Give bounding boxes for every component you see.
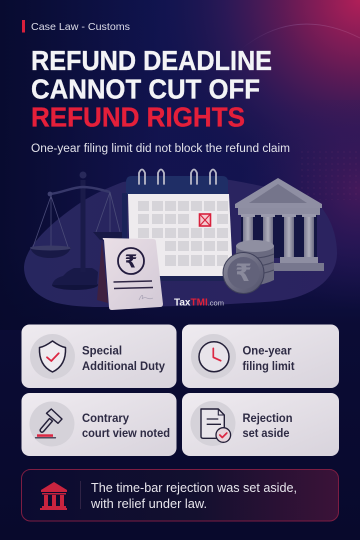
rings [139, 170, 216, 184]
calendar grid [138, 201, 228, 266]
callout text: with relief under law. [90, 496, 207, 511]
illustration [24, 170, 337, 310]
icon: gavel [36, 409, 62, 438]
panel: special additional duty [22, 324, 176, 388]
label: Contrary [82, 411, 129, 425]
logo: TaxTMI.com: TaxTMI.com [174, 298, 224, 308]
marked deadline date [200, 214, 210, 226]
label: filing limit [242, 359, 294, 373]
label: court view noted [82, 426, 170, 440]
icon: refund receipt [97, 238, 163, 310]
icon: court building [40, 482, 67, 510]
icon: rupee coins [223, 240, 274, 294]
panel: one-year filing limit [182, 324, 339, 388]
icon: rupee coins: ₹ [235, 259, 252, 287]
label: Rejection [242, 411, 292, 425]
label [242, 411, 292, 440]
callout text: The time-bar rejection was set aside, [91, 480, 297, 495]
label [82, 344, 165, 373]
panel: contrary court view [22, 393, 176, 456]
icon: refund receipt: ₹ [125, 252, 137, 272]
icon: shield check [39, 341, 66, 372]
title: REFUND RIGHTS [31, 102, 245, 132]
label [242, 344, 294, 373]
title: CANNOT CUT OFF [31, 74, 260, 104]
panel: rejection set aside [182, 393, 339, 456]
title: REFUND DEADLINE [31, 45, 272, 76]
icon: document check [201, 409, 231, 442]
icon: calendar [122, 170, 233, 281]
label [82, 411, 170, 440]
label: Special [82, 344, 122, 358]
label: One-year [242, 344, 292, 358]
title [31, 45, 272, 132]
subtitle: One-year filing limit did not block the refund claim [31, 143, 290, 155]
icon: clock [199, 342, 229, 372]
category tag: Case Law - Customs [31, 21, 130, 33]
icon: bank building [235, 178, 324, 271]
callout text [90, 480, 297, 511]
icon: scales of justice [30, 172, 124, 290]
label: Additional Duty [82, 359, 165, 373]
callout: outcome [22, 470, 338, 521]
label: set aside [242, 426, 290, 440]
backdrop blob [24, 176, 337, 307]
